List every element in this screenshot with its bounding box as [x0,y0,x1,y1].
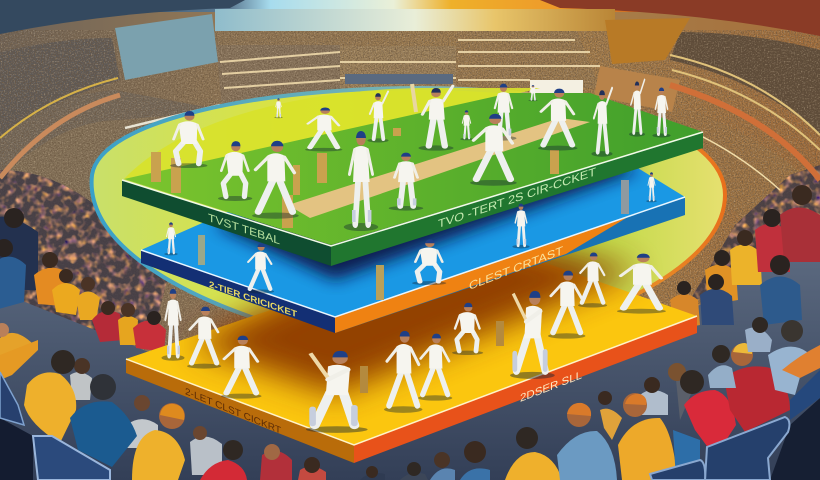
yellow shirt with cap [618,393,677,480]
umpire [491,84,516,141]
fielder [578,253,607,308]
tier 2: blue platform [141,120,685,333]
chair blue [33,436,110,480]
blue surface [141,120,685,317]
white edge [122,132,703,246]
fan [430,452,455,480]
big red shirt fan [724,343,790,432]
tier line lower right [665,120,780,190]
orange tier band right [670,85,820,180]
fan left 8 [0,239,26,310]
right face [331,132,703,266]
tier 1: green platform [122,88,703,266]
blue-grey shirt fan [557,403,617,480]
chair blue small [650,460,705,480]
background fan [190,426,222,475]
fielder [187,307,221,369]
batter [252,141,299,219]
tier lines right [670,55,820,150]
fan right 2 [730,230,762,285]
outfielder [646,172,657,202]
gold tier line left [0,78,118,138]
stumps 9 [376,265,384,300]
stumps 5 [317,153,327,183]
left roof [0,0,245,34]
fan left 5 [92,301,124,342]
sky and roof [0,0,820,12]
pitch strip [288,118,590,218]
fan [460,441,490,480]
white edge [141,197,685,317]
yellow fan [505,427,562,480]
left face [126,359,354,463]
fielder [617,254,666,314]
runner [548,271,585,339]
label: tvo tert cricket: TVO -TERT 2S CIR-CCKET [438,164,596,231]
appealer [591,88,613,157]
stumps 6 [393,128,401,136]
stumps 1 [151,152,161,182]
left lower stand [0,110,340,300]
big batter [344,131,378,231]
fielder [389,153,423,211]
fan [360,466,385,480]
bat raised [418,86,454,151]
pale blue fan [768,320,807,395]
oval strip behind left [124,88,540,179]
bottom centre fans [360,441,490,480]
players on green tier [170,80,671,231]
dark window strip [345,74,453,84]
right background fan [745,317,772,352]
stumps 12 [496,321,504,346]
label: 2dser sll: 2DSER SLL [520,370,582,405]
fan left 4 [76,277,100,320]
label: 2-tier cricicket: 2-TIER CRICICKET [209,279,297,319]
players on yellow tier [161,253,666,433]
fan left 9 [0,323,34,360]
green surface [124,93,703,245]
stumps 4 [293,165,300,195]
runner [221,336,262,399]
bat [412,84,416,112]
glass balustrade [215,9,615,31]
red shirt fan [680,370,736,457]
fan right 1 [705,250,738,305]
upper left dark stand [0,38,120,138]
white rail left [125,105,220,128]
appealer [629,80,645,137]
chairs and fans in the foreground right [505,317,820,480]
small fielder [460,110,473,140]
background fan [640,377,668,415]
fielder [246,244,274,294]
fan orange legs [0,340,38,380]
fan right 7 [760,255,802,325]
fielder [218,141,252,201]
fielder [384,331,422,413]
shadow under green tier [215,130,640,280]
label: tvst tebal: TVST TEBAL [208,212,280,247]
fan right 5 [670,281,700,330]
chair far left [0,372,24,425]
chairs and fans in the foreground left [0,340,326,480]
orange box [594,66,680,112]
keeper [170,111,207,168]
upper tier left [216,45,340,108]
stumps 10 [621,180,629,214]
yellow surface [126,240,697,445]
fielder [164,222,178,255]
upper tier centre [340,46,456,108]
label: 2-let cost cricket: 2-LET CLST CICKRT [185,386,281,437]
crowd base [0,165,820,345]
right face [335,197,685,333]
fielder [652,88,671,138]
white edge [126,316,697,445]
crouch [412,239,446,285]
background fan [668,363,696,420]
centre lower stand [340,105,540,135]
stumps 3 [282,195,293,228]
yellow shirt fan [24,350,76,443]
right roof [540,0,820,36]
background fan [298,457,326,480]
label: clest crtast: CLEST CRTAST [469,243,563,293]
fan right 3 [755,209,790,272]
left face [122,180,331,266]
right lower stand [590,100,820,300]
upper right dark stand [670,32,820,135]
chair far right [790,370,820,420]
oval playing field [92,88,725,330]
batter [510,291,555,379]
boxes left [115,14,218,80]
orange section of right face [335,217,628,333]
stumps 7 [550,150,559,174]
orange tier band left [0,95,120,178]
fan right 6 [700,274,734,325]
background fan [598,391,622,440]
fielder [512,203,530,248]
small fielder [274,98,283,118]
players on blue tier [164,172,657,294]
fielder [161,289,185,361]
dark corner [770,398,820,480]
fan left 3 [52,269,80,315]
background fan [123,395,158,448]
left mid stand [0,90,222,200]
fan left 2 [34,252,66,306]
far fielder [528,85,538,101]
orange shirt arm [782,345,820,378]
tier stripes [220,40,600,106]
scoreboard [530,80,583,147]
fan left 7 [133,311,166,352]
right face [354,316,697,463]
crowd colour blotches [0,165,820,330]
blue shirt fan [70,374,137,467]
batter [306,351,368,433]
bowler [470,114,517,186]
fielder [305,107,342,151]
pale blue fan [708,345,736,388]
stumps 2 [171,158,181,193]
red fan [200,440,247,480]
chair blue large [705,417,789,480]
tier 3: yellow platform [126,235,697,463]
stadium background [0,0,820,352]
stumps 8 [198,235,205,265]
boxes right [605,18,690,64]
stumps 11 [360,366,368,393]
shadow under blue tier [190,235,640,395]
raised-arm fielder [367,92,389,143]
fan left 6 [118,303,138,345]
stumps [151,128,629,393]
crouch [452,303,483,355]
fan left 1 [0,208,38,290]
background fan [260,444,292,480]
grey aisle below the tiers [0,250,820,480]
yellow fan with cap [132,403,185,480]
upper fans [0,185,820,360]
fielder [538,89,578,151]
fielder [418,334,452,401]
left face [141,250,335,333]
blue trousers [673,430,700,480]
fan [400,462,428,480]
background fan [70,358,92,400]
fan right 4 [780,185,820,262]
dark corner left [0,418,33,480]
upper tier right [456,27,600,88]
